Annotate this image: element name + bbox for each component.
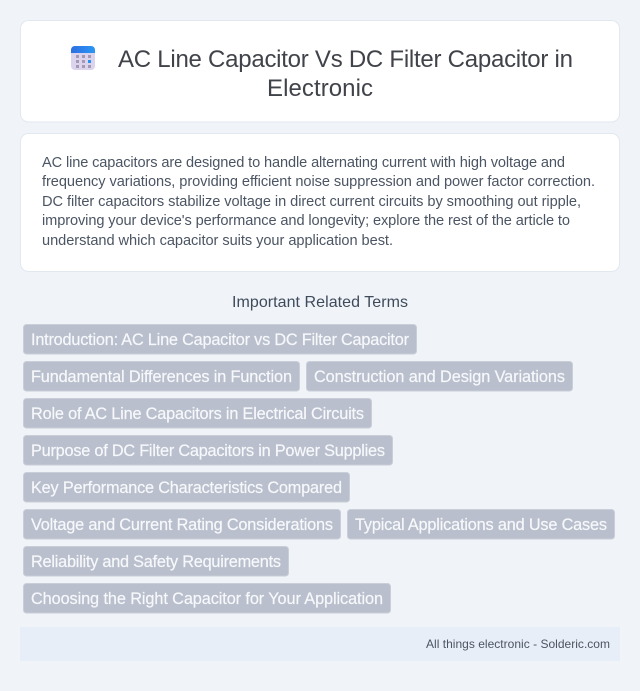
tag: fundamental differences: Fundamental Differences in Function: [31, 368, 292, 386]
title: AC Line Capacitor Vs DC Filter Capacitor in: [118, 46, 573, 73]
panel: header: [20, 20, 620, 122]
intro paragraph: AC line capacitors are designed to handle alternating current with high voltage and: [42, 155, 565, 171]
tag: role of AC line capacitors: [24, 398, 372, 428]
tag: purpose of DC filter capacitors: Purpose of DC Filter Capacitors in Power Supplies: [31, 442, 385, 460]
footer: [20, 627, 620, 661]
intro paragraph: DC filter capacitors stabilize voltage in direct current circuits by smoothing out ripple,: [42, 194, 581, 210]
tag: voltage and current: [24, 510, 340, 539]
intro paragraph: frequency variations, providing efficient noise suppression and power factor correction.: [42, 174, 595, 190]
intro paragraph: understand which capacitor suits your application best.: [42, 233, 393, 249]
intro paragraph: [42, 155, 595, 249]
tag: voltage and current: Voltage and Current Rating Considerations: [31, 516, 333, 534]
panel: related term tags: [24, 324, 614, 613]
intro paragraph: improving your device's performance and longevity; explore the rest of the article to: [42, 213, 570, 229]
icon: calendar: [71, 46, 95, 70]
tag: construction and design: [306, 362, 572, 391]
tag: reliability and safety: [24, 546, 288, 576]
title: Electronic: [267, 75, 373, 102]
footer: All things electronic - Solderic.com: [426, 637, 610, 651]
panel: intro text: [20, 134, 620, 272]
tag: purpose of DC filter capacitors: [24, 436, 392, 465]
tag: typical applications: Typical Applications and Use Cases: [355, 516, 607, 534]
tag: key performance: [24, 472, 350, 502]
tag: fundamental differences: [24, 362, 300, 391]
tag: introduction: [24, 324, 416, 354]
tag: role of AC line capacitors: Role of AC Line Capacitors in Electrical Circuits: [31, 405, 364, 423]
tag: choosing the right capacitor: Choosing the Right Capacitor for Your Application: [31, 590, 383, 608]
tag: typical applications: [348, 510, 614, 539]
heading: important related terms: Important Related Terms: [232, 294, 408, 311]
tag: reliability and safety: Reliability and Safety Requirements: [31, 553, 281, 571]
tag: key performance: Key Performance Characteristics Compared: [31, 479, 342, 497]
tag: choosing the right capacitor: [24, 584, 390, 613]
tag: construction and design: Construction and Design Variations: [314, 368, 565, 386]
title: [118, 46, 573, 102]
tag: introduction: Introduction: AC Line Capacitor vs DC Filter Capacitor: [31, 331, 410, 349]
